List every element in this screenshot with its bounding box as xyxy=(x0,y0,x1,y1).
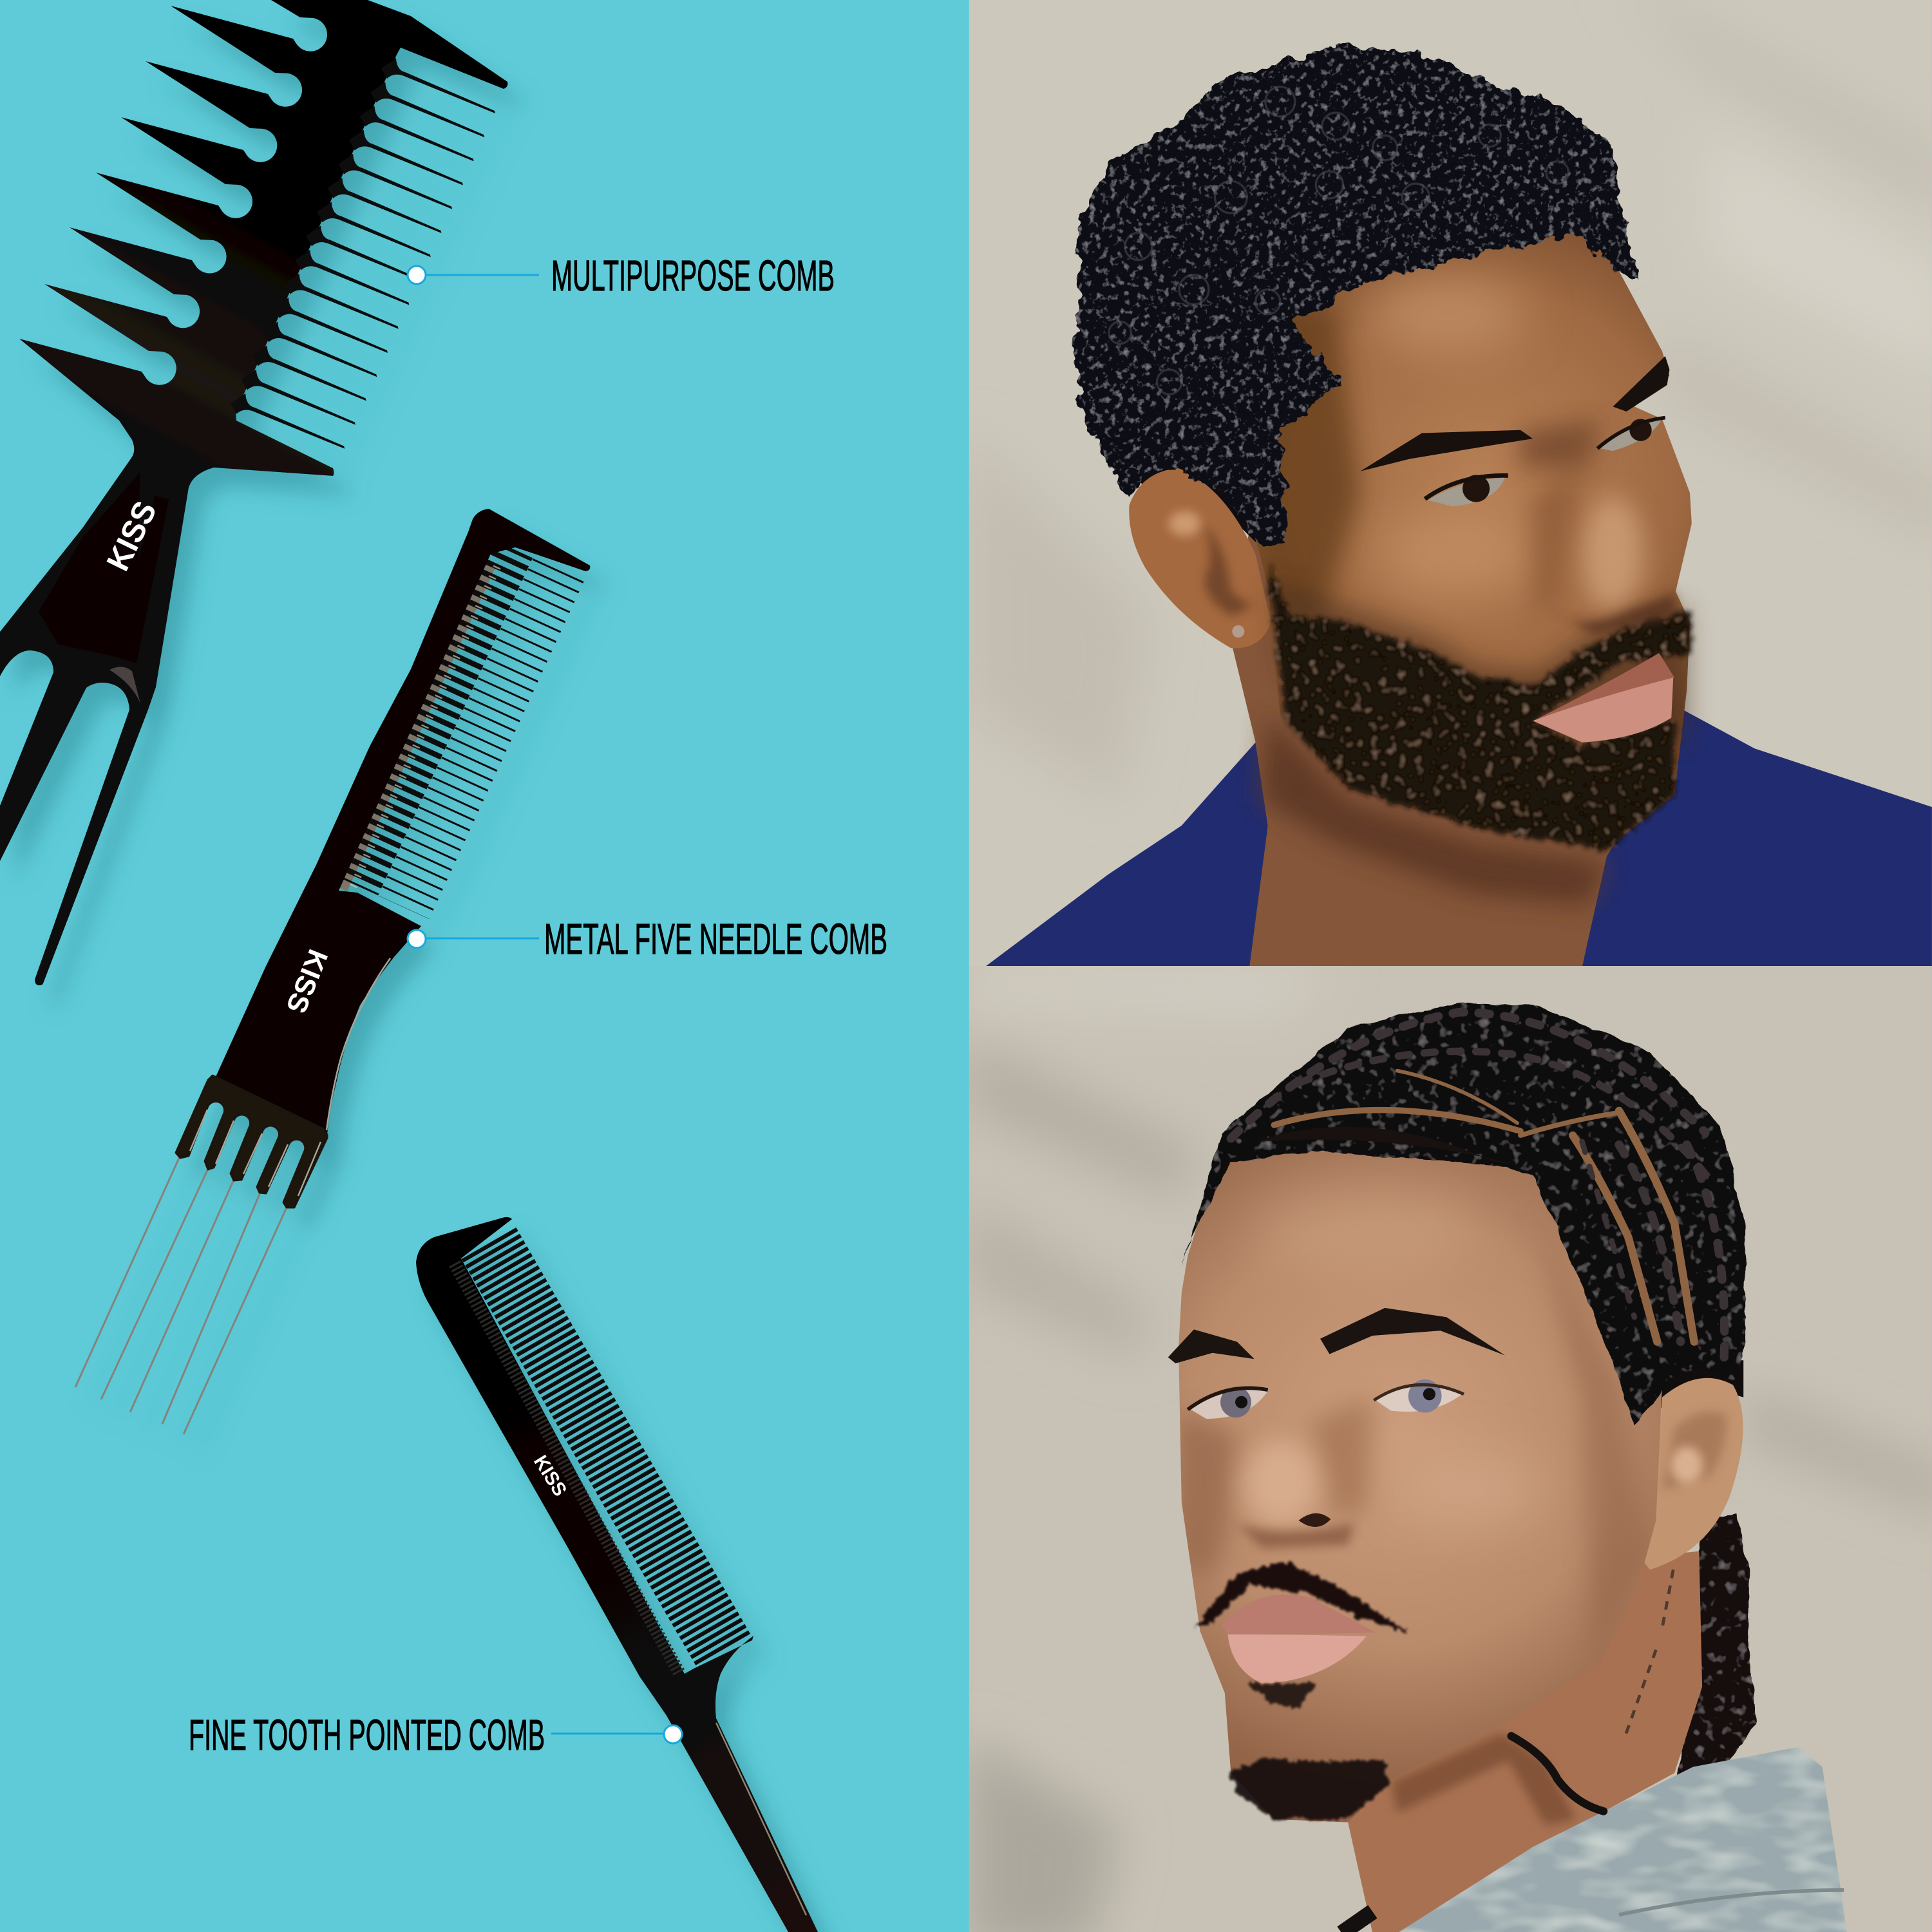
neck xyxy=(1348,1551,1702,1932)
long braid xyxy=(1674,1513,1756,1779)
right eye xyxy=(1374,1379,1464,1413)
callout: metal five needle comb xyxy=(408,915,887,963)
silver band xyxy=(341,562,491,889)
upper lip xyxy=(1536,653,1674,719)
fine tooth pointed comb xyxy=(416,1217,818,1932)
hair cap with cornrows xyxy=(1182,1003,1745,1425)
handle and spine xyxy=(213,509,590,1135)
ear inner shadow xyxy=(1662,1412,1727,1490)
gloss highlight on fork xyxy=(109,667,140,703)
logo: KISS: KISS xyxy=(280,945,334,1018)
face xyxy=(1213,185,1736,862)
callout: fine tooth pointed comb xyxy=(189,1711,682,1759)
hairline strip xyxy=(1256,1127,1520,1166)
panel: teal comb background xyxy=(0,0,969,1932)
face shadows xyxy=(1175,1188,1650,1662)
label: FINE TOOTH POINTED COMB xyxy=(189,1711,545,1759)
denim jacket xyxy=(1397,1747,1847,1932)
leader line xyxy=(422,274,539,276)
goatee xyxy=(1231,1757,1388,1819)
stubble fade above beard xyxy=(1271,579,1687,739)
needles xyxy=(75,1157,287,1434)
backdrop xyxy=(966,966,1932,1932)
backdrop folds xyxy=(969,176,1932,761)
right eye xyxy=(1598,418,1665,451)
braid sheen strands xyxy=(1231,1012,1725,1367)
lower collar braid xyxy=(1342,1911,1372,1932)
face highlights and shadows xyxy=(1237,277,1643,616)
neck shadow under beard xyxy=(1262,715,1607,905)
scalp parting lines xyxy=(1274,1071,1694,1342)
multipurpose comb xyxy=(0,0,507,985)
spine and tail xyxy=(416,1217,818,1932)
ear xyxy=(1640,1378,1743,1569)
thick tooth roots xyxy=(359,549,514,887)
left eye xyxy=(1425,475,1508,506)
marker dot xyxy=(408,266,426,284)
metal five needle comb xyxy=(75,509,590,1434)
hair xyxy=(1074,44,1640,548)
shirt xyxy=(985,708,1932,967)
backdrop xyxy=(966,0,1932,967)
tail highlight xyxy=(716,1723,806,1915)
ear highlight xyxy=(1169,511,1200,536)
ear xyxy=(1129,468,1271,649)
ear inner shadow xyxy=(1203,524,1253,616)
marker dot xyxy=(664,1725,682,1743)
leader line xyxy=(551,1732,668,1735)
thin braid xyxy=(1511,1736,1604,1811)
comb body with spikes and fork xyxy=(0,0,507,985)
teeth xyxy=(489,1243,724,1653)
earring xyxy=(1232,625,1244,638)
neck shadow under jaw xyxy=(1391,1733,1576,1825)
textured tooth base xyxy=(455,1264,680,1674)
left eyebrow xyxy=(1360,430,1533,471)
fine thin teeth xyxy=(404,570,558,907)
neck tattoo xyxy=(1625,1569,1673,1736)
cream dashes on band xyxy=(348,567,497,898)
leader line xyxy=(422,938,539,939)
marker dot xyxy=(408,930,426,948)
face xyxy=(1151,1114,1705,1835)
right eyebrow xyxy=(1613,356,1669,412)
mustache xyxy=(1195,1562,1408,1633)
neck xyxy=(1231,530,1650,967)
jacket hem xyxy=(1619,1890,1844,1915)
wide teeth xyxy=(231,58,495,449)
lower lip xyxy=(1228,1634,1367,1683)
nose shadow xyxy=(1551,591,1674,634)
panel: top portrait, curly hair and beard xyxy=(966,0,1932,967)
hair underlay behind ear xyxy=(1114,456,1286,542)
hair underlay above ear xyxy=(1638,1360,1743,1410)
label: METAL FIVE NEEDLE COMB xyxy=(544,915,887,963)
handle highlight xyxy=(327,958,390,1130)
beard xyxy=(1268,561,1692,850)
left eye xyxy=(1188,1387,1268,1419)
dark neck reflection xyxy=(39,473,169,663)
logo: KISS: KISS xyxy=(529,1452,571,1500)
left eyebrow xyxy=(1168,1329,1255,1363)
five-finger base xyxy=(176,1075,327,1208)
finger highlights xyxy=(190,1110,321,1196)
hair curl highlights xyxy=(1109,87,1569,394)
nostril xyxy=(1299,1513,1331,1527)
nose base shadow xyxy=(1237,1524,1354,1548)
ear highlight xyxy=(1671,1446,1703,1484)
upper lip xyxy=(1222,1595,1376,1634)
backdrop folds xyxy=(966,966,1932,1932)
label: MULTIPURPOSE COMB xyxy=(551,252,835,300)
logo: KISS: KISS xyxy=(100,496,164,576)
right eyebrow xyxy=(1320,1308,1505,1356)
callout: multipurpose comb xyxy=(408,252,835,300)
lower lip xyxy=(1533,677,1673,743)
chin patch xyxy=(1249,1683,1317,1709)
panel: bottom portrait, cornrow braids xyxy=(966,966,1932,1932)
